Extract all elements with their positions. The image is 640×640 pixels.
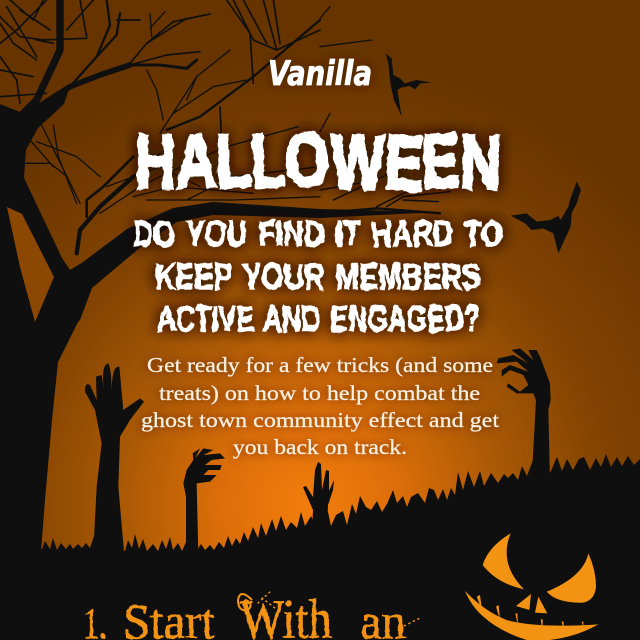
bat large	[511, 182, 581, 253]
paragraph line 1: Get ready for a few tricks (and some	[147, 353, 493, 377]
zombie hand: tall open hand	[85, 363, 144, 552]
paragraph line 4: you back on track.	[233, 435, 407, 459]
heading line 3: ACTIVE AND ENGAGED?	[157, 298, 480, 339]
intro paragraph	[141, 353, 499, 459]
pumpkin left eye	[483, 533, 524, 589]
title: HALLOWEEN: HALLOWEEN	[135, 117, 502, 207]
graveyard ground with grass	[0, 454, 640, 640]
section heading: 1. Start With an	[83, 589, 406, 640]
thick upper branches	[20, 0, 60, 117]
tree trunk and main limbs	[0, 86, 440, 552]
paragraph line 2: treats) on how to help combat the	[159, 381, 480, 405]
tree silhouette	[0, 0, 450, 552]
zombie hand: small open hand	[303, 462, 334, 530]
pumpkin right eye	[547, 553, 596, 603]
zombie hand: claw right	[497, 348, 551, 480]
pumpkin grin	[465, 591, 598, 640]
swirl spiral	[238, 594, 252, 610]
heading line 2: KEEP YOUR MEMBERS	[155, 256, 481, 297]
pumpkin face	[465, 533, 598, 640]
ink splatter	[258, 590, 420, 628]
logo: Vanilla: Vanilla	[268, 54, 372, 94]
right side twigs	[320, 7, 372, 132]
thin upper twigs	[130, 52, 200, 65]
heading: question	[133, 213, 503, 339]
decorative swirl on the W	[238, 590, 420, 628]
bat small	[386, 53, 432, 117]
heading line 1: DO YOU FIND IT HARD TO	[133, 213, 503, 254]
orange gap between trunk forks	[7, 207, 54, 322]
paragraph line 3: ghost town community effect and get	[141, 408, 499, 432]
pumpkin nose	[516, 594, 547, 613]
zombie hand: claw centre left	[183, 448, 225, 553]
